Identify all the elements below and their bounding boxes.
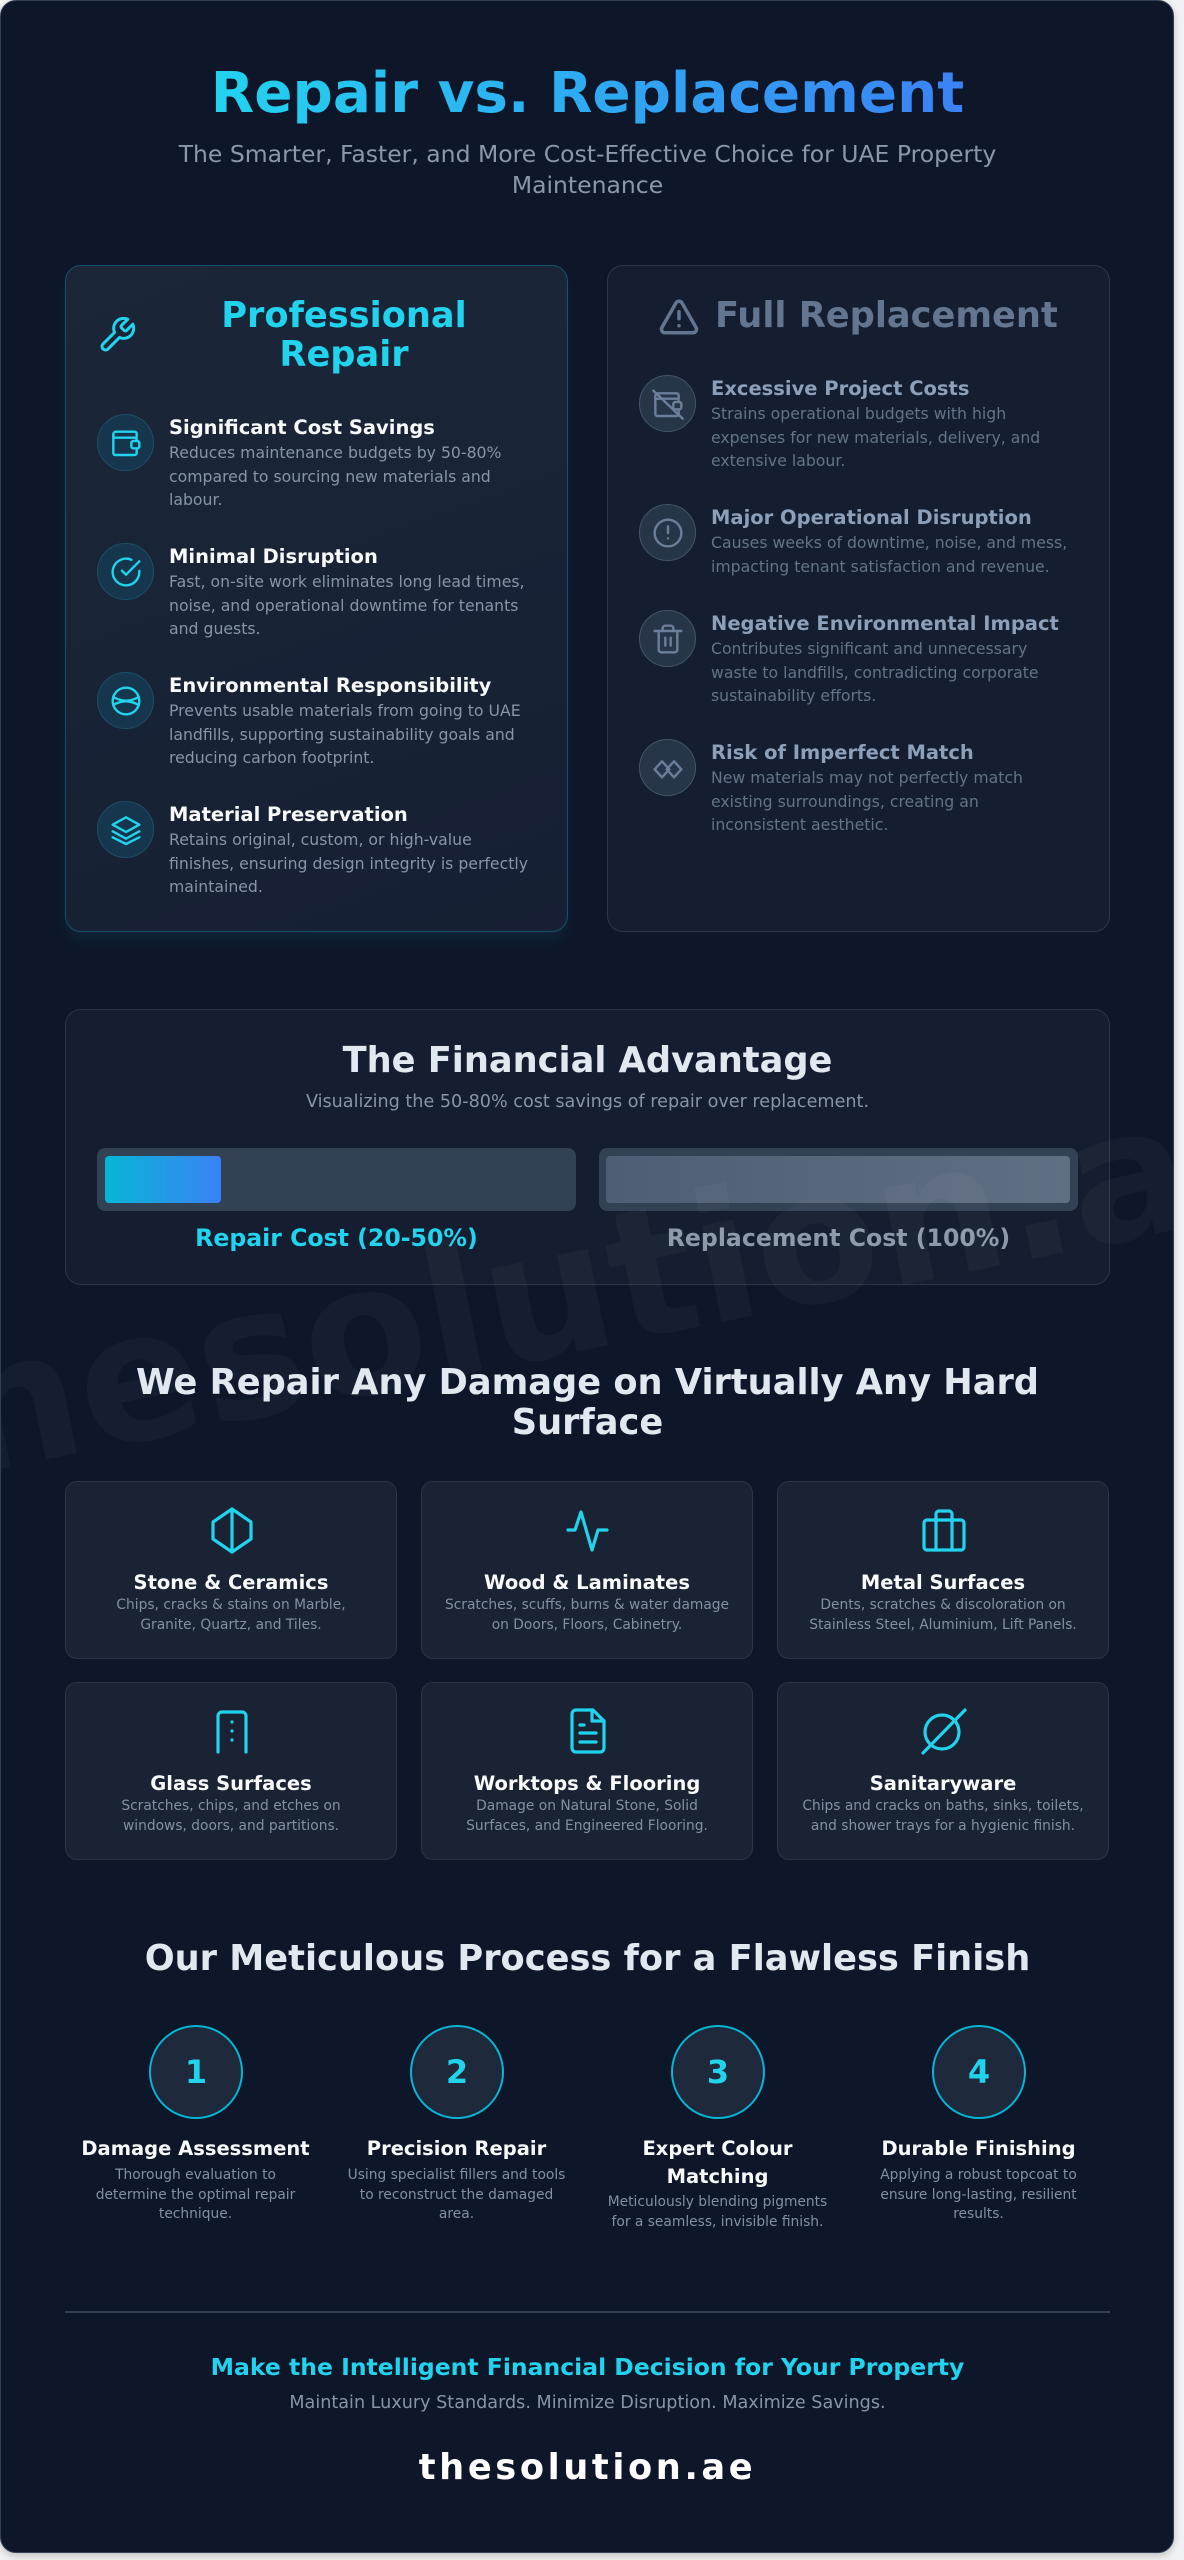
- subheading: Visualizing the 50-80% cost savings of repair over replacement.: [306, 1092, 869, 1112]
- item: excessive project costs: [639, 375, 1040, 470]
- item: risk of imperfect match: [639, 739, 1023, 834]
- icon: wrench: [100, 316, 136, 352]
- step 3: Matching: [667, 2165, 768, 2188]
- heading: surfaces: We Repair Any Damage on Virtually Any Hard: [136, 1362, 1039, 1403]
- heading: process: Our Meticulous Process for a Flawless Finish: [145, 1938, 1030, 1979]
- step 2: Using specialist fillers and tools: [348, 2167, 565, 2183]
- icon: trash: [639, 610, 696, 667]
- card: worktops and flooring: Worktops & Flooring: [474, 1772, 700, 1795]
- item: negative environmental impact: waste to landfills, contradicting corporate: [711, 662, 1039, 682]
- item: material preservation: Retains original, custom, or high-value: [169, 830, 472, 849]
- item: excessive project costs: Strains operational budgets with high: [711, 404, 1006, 423]
- item: significant cost savings: compared to sourcing new materials and: [169, 466, 491, 486]
- icon: document: [570, 1708, 606, 1754]
- card: worktops and flooring: [421, 1682, 753, 1860]
- step 3: Expert Colour: [642, 2137, 793, 2160]
- bar chart: repair cost: [97, 1148, 576, 1211]
- bar: replacement value: [606, 1156, 1070, 1203]
- card: metal surfaces: Stainless Steel, Aluminium, Lift Panels.: [809, 1616, 1077, 1632]
- item: negative environmental impact: Contributes significant and unnecessary: [711, 639, 1027, 658]
- heading: surfaces: Surface: [512, 1402, 663, 1443]
- card: metal surfaces: [777, 1481, 1109, 1659]
- panel: financial advantage: [65, 1009, 1110, 1285]
- brand: thesolution.ae: [419, 2447, 756, 2488]
- label: replacement cost: Replacement Cost (100%): [667, 1224, 1010, 1252]
- divider: [65, 2311, 1110, 2313]
- item: environmental responsibility: Environmental Responsibility: [169, 674, 491, 697]
- icon: layers: [97, 801, 154, 858]
- icon: alert circle: [639, 504, 696, 561]
- card: wood and laminates: on Doors, Floors, Cabinetry.: [492, 1616, 682, 1632]
- step 4: Applying a robust topcoat to: [880, 2167, 1077, 2183]
- step 3: [608, 2025, 827, 2230]
- heading: financial advantage: The Financial Advantage: [343, 1040, 832, 1081]
- icon: stone hexagon: [211, 1507, 253, 1554]
- heading: professional repair: Repair: [279, 334, 409, 375]
- item: minimal disruption: and guests.: [169, 619, 261, 638]
- step 1: Damage Assessment: [81, 2137, 310, 2160]
- number badge 1: 1: [185, 2053, 207, 2091]
- card: stone and ceramics: [65, 1481, 397, 1659]
- icon: check circle: [97, 543, 154, 600]
- subtitle: [178, 140, 996, 199]
- number badge 2: [410, 2025, 504, 2119]
- panel: full replacement: [607, 265, 1110, 932]
- number badge 2: 2: [446, 2053, 468, 2091]
- step 4: Durable Finishing: [881, 2137, 1076, 2160]
- icon: crossed wallet: [639, 375, 696, 432]
- icon: warning triangle: [660, 300, 698, 334]
- card: wood and laminates: Wood & Laminates: [484, 1571, 690, 1594]
- step 1: [81, 2025, 310, 2222]
- card: wood and laminates: Scratches, scuffs, burns & water damage: [445, 1597, 729, 1613]
- item: minimal disruption: Minimal Disruption: [169, 545, 378, 568]
- card: stone and ceramics: Granite, Quartz, and Tiles.: [140, 1616, 322, 1632]
- icon: briefcase: [922, 1509, 966, 1552]
- icon: pulse: [566, 1510, 609, 1552]
- item: minimal disruption: noise, and operational downtime for tenants: [169, 596, 518, 614]
- item: major operational disruption: Causes weeks of downtime, noise, and mess,: [711, 533, 1067, 552]
- card: stone and ceramics: Stone & Ceramics: [134, 1571, 328, 1594]
- icon: diamonds: [639, 739, 696, 796]
- item: significant cost savings: Reduces maintenance budgets by 50-80%: [169, 443, 501, 462]
- step 1: technique.: [159, 2206, 232, 2222]
- item: environmental responsibility: reducing carbon footprint.: [169, 748, 374, 767]
- step 3: Meticulously blending pigments: [608, 2194, 827, 2210]
- item: minimal disruption: [97, 543, 525, 638]
- number badge 4: [932, 2025, 1026, 2119]
- item: significant cost savings: labour.: [169, 490, 222, 509]
- item: environmental responsibility: Prevents usable materials from going to UAE: [169, 701, 521, 720]
- heading: professional repair: Professional: [221, 295, 467, 336]
- number badge 3: 3: [707, 2053, 729, 2091]
- number badge 3: [671, 2025, 765, 2119]
- item: negative environmental impact: sustainability efforts.: [711, 686, 876, 705]
- step 2: area.: [439, 2206, 474, 2222]
- item: minimal disruption: Fast, on-site work eliminates long lead times,: [169, 572, 525, 591]
- card: sanitaryware: Sanitaryware: [870, 1772, 1016, 1795]
- card: sanitaryware: and shower trays for a hygienic finish.: [811, 1818, 1075, 1834]
- card: stone and ceramics: Chips, cracks & stains on Marble,: [116, 1597, 346, 1613]
- item: excessive project costs: expenses for new materials, delivery, and: [711, 428, 1040, 446]
- icon: globe: [97, 672, 154, 729]
- step 4: ensure long-lasting, resilient: [880, 2186, 1077, 2202]
- item: excessive project costs: extensive labour.: [711, 451, 845, 470]
- number badge 4: 4: [968, 2053, 990, 2091]
- item: significant cost savings: Significant Cost Savings: [169, 416, 435, 439]
- item: risk of imperfect match: inconsistent aesthetic.: [711, 815, 888, 834]
- card: glass surfaces: Scratches, chips, and etches on: [121, 1798, 341, 1814]
- step 4: [880, 2025, 1077, 2222]
- panel: professional repair: [65, 265, 568, 932]
- step 4: results.: [953, 2206, 1004, 2222]
- card: metal surfaces: Dents, scratches & discoloration on: [820, 1597, 1066, 1613]
- subtitle: The Smarter, Faster, and More Cost-Effective Choice for UAE Property: [179, 140, 996, 168]
- item: negative environmental impact: Negative Environmental Impact: [711, 612, 1059, 635]
- call to action: Make the Intelligent Financial Decision for Your Property: [211, 2353, 964, 2381]
- item: major operational disruption: Major Operational Disruption: [711, 506, 1032, 529]
- subtitle: Maintenance: [512, 171, 663, 199]
- item: risk of imperfect match: existing surroundings, creating an: [711, 792, 979, 810]
- step 2: [348, 2025, 565, 2222]
- icon: crossed circle: [921, 1708, 967, 1755]
- step 2: to reconstruct the damaged: [360, 2186, 553, 2202]
- card: glass surfaces: windows, doors, and partitions.: [123, 1818, 339, 1834]
- card: glass surfaces: [65, 1682, 397, 1860]
- bar chart: replacement cost: [599, 1148, 1078, 1211]
- item: major operational disruption: [639, 504, 1067, 576]
- card: sanitaryware: [777, 1682, 1109, 1860]
- card: sanitaryware: Chips and cracks on baths, sinks, toilets,: [802, 1798, 1084, 1814]
- step 1: determine the optimal repair: [96, 2186, 295, 2202]
- step 2: Precision Repair: [367, 2137, 546, 2160]
- card: metal surfaces: Metal Surfaces: [861, 1571, 1025, 1594]
- card: wood and laminates: [421, 1481, 753, 1659]
- step 3: for a seamless, invisible finish.: [612, 2214, 823, 2230]
- item: material preservation: Material Preservation: [169, 803, 408, 826]
- heading: surfaces: [136, 1362, 1039, 1443]
- bar: repair value: [105, 1156, 221, 1203]
- item: environmental responsibility: landfills, supporting sustainability goals and: [169, 724, 515, 744]
- item: significant cost savings: [97, 414, 501, 509]
- item: material preservation: maintained.: [169, 877, 263, 896]
- card: glass surfaces: Glass Surfaces: [150, 1772, 312, 1795]
- item: excessive project costs: Excessive Project Costs: [711, 377, 969, 400]
- item: environmental responsibility: [97, 672, 521, 767]
- item: major operational disruption: impacting tenant satisfaction and revenue.: [711, 556, 1050, 576]
- icon: glass door: [216, 1710, 248, 1754]
- item: risk of imperfect match: New materials may not perfectly match: [711, 768, 1023, 787]
- item: negative environmental impact: [639, 610, 1059, 705]
- card: worktops and flooring: Damage on Natural Stone, Solid: [476, 1798, 698, 1814]
- heading: professional repair: [221, 295, 467, 375]
- footer tagline: Maintain Luxury Standards. Minimize Disruption. Maximize Savings.: [289, 2393, 886, 2413]
- label: repair cost: Repair Cost (20-50%): [195, 1224, 478, 1252]
- item: risk of imperfect match: Risk of Imperfect Match: [711, 741, 974, 764]
- number badge 1: [149, 2025, 243, 2119]
- step 1: Thorough evaluation to: [115, 2167, 276, 2183]
- heading: full replacement: Full Replacement: [715, 295, 1058, 336]
- item: material preservation: finishes, ensuring design integrity is perfectly: [169, 854, 528, 872]
- title: Repair vs. Replacement: [211, 61, 964, 126]
- card: worktops and flooring: Surfaces, and Engineered Flooring.: [466, 1818, 708, 1834]
- item: material preservation: [97, 801, 528, 896]
- icon: wallet: [97, 414, 154, 471]
